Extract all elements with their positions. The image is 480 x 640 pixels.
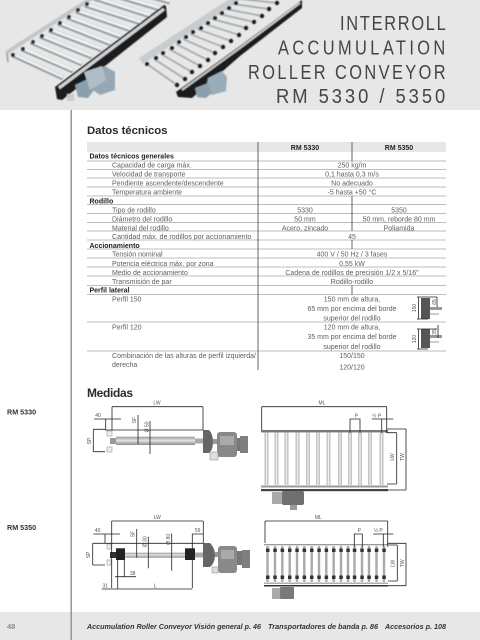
row labels: Combinación de las alturas de perfil izquierda/ — [112, 353, 256, 360]
drawing: RM 5350 section view: 31 — [103, 584, 108, 590]
drawing: RM 5350 plan view: LW — [390, 559, 396, 567]
row values — [282, 163, 436, 372]
footer band — [0, 612, 480, 640]
row values: 0,55 kW — [339, 261, 365, 268]
drawing: RM 5350 section view: 38 — [130, 571, 136, 577]
footer links — [86, 622, 447, 631]
row values: 120 mm de altura, — [324, 324, 380, 332]
footer links: Accesorios p. 108 — [384, 622, 447, 631]
row labels: Diámetro del rodillo — [112, 216, 172, 223]
drawing: RM 5350 section view: SP — [86, 551, 92, 558]
illustration: RM 5330 conveyor — [6, 0, 170, 101]
drawing: RM 5350 section view: Ø 80 — [166, 534, 172, 545]
row labels: Tipo de rodillo — [112, 208, 156, 215]
row values: 400 V / 50 Hz / 3 fases — [317, 252, 388, 259]
drawing: RM 5330 section view: SF — [132, 417, 138, 423]
row labels — [90, 154, 256, 369]
row values: Cadena de rodillos de precisión 1/2 x 5/16" — [285, 270, 419, 277]
row labels: Perfil lateral — [90, 288, 130, 295]
side label: RM 5350: RM 5350 — [7, 523, 36, 532]
row labels: derecha — [112, 362, 137, 369]
row values: 120/120 — [339, 364, 365, 372]
row values: 150/150 — [339, 353, 365, 360]
drawing: RM 5350 section view: LW — [154, 515, 161, 521]
drawing: RM 5330 plan view — [261, 400, 406, 510]
drawing: RM 5330 section view: Ø 50 — [144, 421, 150, 432]
drawing: RM 5330 plan view: P — [355, 414, 359, 420]
icon: profile 150 section: 150 — [412, 304, 418, 312]
drawing: RM 5350 plan view: TW — [400, 559, 406, 567]
row labels: Material del rodillo — [112, 225, 169, 232]
icon: profile 150 section — [412, 297, 442, 319]
drawing: RM 5350 plan view — [264, 515, 406, 599]
drawing: RM 5350 section view: Ø 30 — [143, 536, 149, 547]
row values: 50 mm, reborde 80 mm — [363, 216, 436, 223]
table header: RM 5330 — [291, 145, 319, 152]
icon: profile 120 section — [412, 325, 442, 349]
drawing: RM 5350 plan view: P — [358, 528, 362, 534]
row values: 50 mm — [294, 216, 316, 223]
row values: 5330 — [297, 208, 313, 215]
icon: profile 120 section: 120 — [412, 335, 418, 343]
vertical page divider — [70, 110, 72, 640]
footer links: Accumulation Roller Conveyor Visión general p. 46 — [86, 622, 262, 631]
title: RM 5330 / 5350 — [276, 86, 445, 108]
drawing: RM 5350 section view: L — [154, 584, 157, 590]
drawing: RM 5350 section view: 40 — [95, 528, 101, 534]
row labels: Cantidad máx. de rodillos por accionamiento — [112, 234, 252, 241]
illustration: RM 5350 conveyor — [141, 0, 302, 98]
header band — [0, 0, 480, 110]
row labels: Medio de accionamiento — [112, 270, 188, 277]
row values: 35 mm por encima del borde — [307, 334, 397, 341]
drawing: RM 5330 section view: SP — [87, 437, 93, 444]
row labels: Potencia eléctrica máx. por zona — [112, 261, 214, 268]
heading: datos tecnicos: Datos técnicos — [87, 125, 168, 137]
drawing: RM 5330 plan view: ½ P — [372, 412, 382, 420]
icon: profile 120 section: 35 — [432, 329, 438, 335]
footer links: Transportadores de banda p. 86 — [268, 622, 379, 631]
drawing: RM 5350 plan view: ML — [315, 515, 322, 521]
row values: Rodillo-rodillo — [331, 279, 373, 286]
table header: RM 5350 — [385, 145, 413, 152]
drawing: RM 5330 plan view: LW — [390, 453, 396, 461]
title — [248, 11, 446, 108]
heading: medidas: Medidas — [87, 386, 133, 400]
row values: Poliamida — [384, 225, 414, 232]
row values: superior del rodillo — [323, 316, 381, 322]
row values: 250 kg/m — [338, 163, 367, 170]
page number: 48 — [7, 622, 15, 631]
row values: 65 mm por encima del borde — [307, 306, 397, 313]
row labels: Capacidad de carga máx. — [112, 163, 192, 170]
title: ROLLER CONVEYOR — [248, 60, 446, 83]
row labels: Datos técnicos generales — [90, 154, 174, 161]
row labels: Accionamiento — [90, 243, 140, 250]
title: ACCUMULATION — [278, 36, 445, 59]
row labels: Tensión nominal — [112, 252, 163, 259]
row values: 0,1 hasta 0,3 m/s — [325, 172, 379, 179]
row values: 45 — [348, 234, 356, 241]
specifications table — [87, 142, 446, 372]
row values: 150 mm de altura, — [324, 296, 380, 304]
row values: -5 hasta +50 °C — [328, 189, 376, 197]
drawing: RM 5330 plan view: TW — [400, 453, 406, 461]
drawing: RM 5350 section view — [86, 515, 250, 590]
icon: profile 150 section: 65 — [432, 299, 438, 305]
side label: RM 5330: RM 5330 — [7, 408, 36, 417]
row values: Acero, zincado — [282, 225, 328, 232]
drawing: RM 5350 plan view: ½ P — [374, 527, 383, 534]
row values: No adecuado — [331, 181, 373, 188]
drawing: RM 5330 section view: LW — [153, 400, 161, 406]
drawing: RM 5350 section view: 59 — [195, 528, 201, 534]
drawing: RM 5330 section view — [87, 400, 248, 460]
row labels: Perfil 150 — [112, 296, 142, 304]
row labels: Transmisión de par — [112, 279, 172, 286]
drawing: RM 5350 section view: SF — [130, 531, 136, 537]
row labels: Pendiente ascendente/descendente — [112, 181, 224, 188]
title: INTERROLL — [340, 11, 446, 34]
row labels: Rodillo — [90, 198, 113, 205]
row labels: Perfil 120 — [112, 324, 142, 332]
row labels: Velocidad de transporte — [112, 172, 186, 179]
row values: superior del rodillo — [323, 344, 381, 351]
table header — [291, 145, 413, 152]
row labels: Temperatura ambiente — [112, 190, 182, 197]
row values: 5350 — [391, 208, 407, 215]
drawing: RM 5330 section view: 40 — [95, 413, 101, 419]
drawing: RM 5330 plan view: ML — [319, 400, 326, 406]
